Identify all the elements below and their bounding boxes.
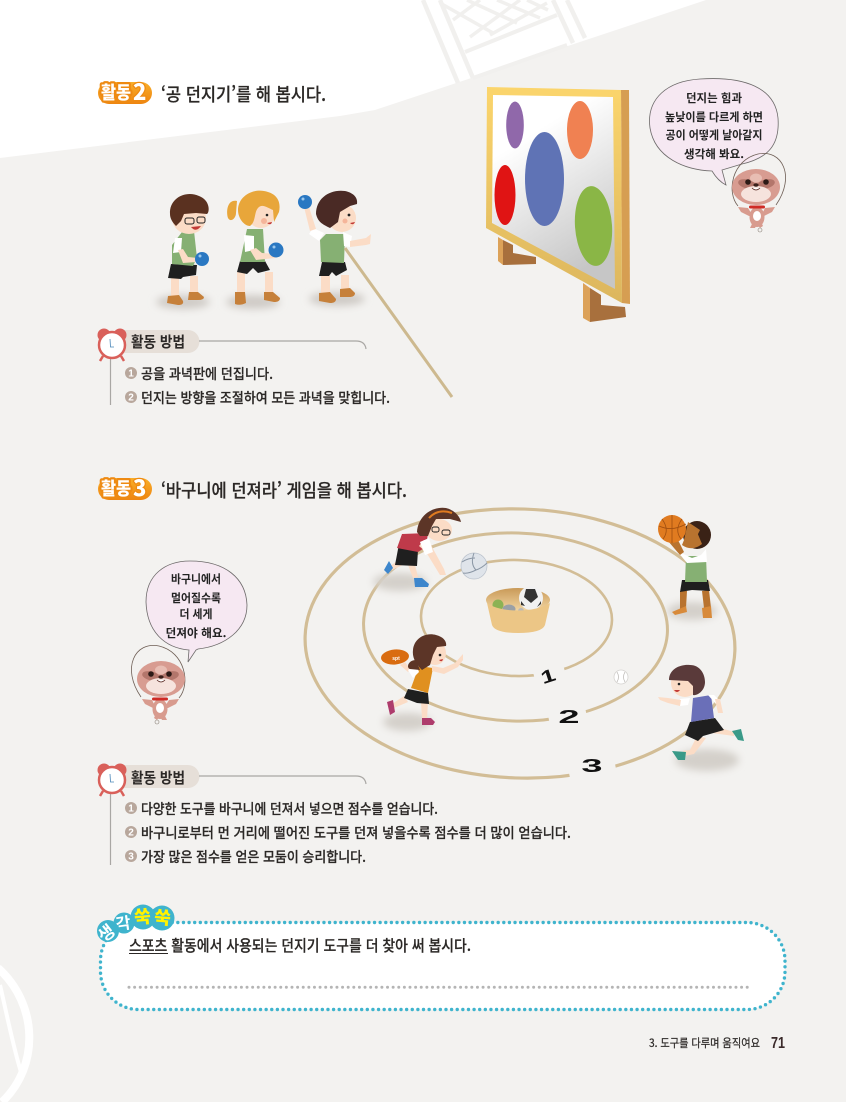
step 3: 3 — [128, 852, 134, 862]
volleyball — [461, 553, 487, 579]
small ball — [518, 608, 524, 614]
baseball — [614, 670, 628, 684]
dotted answer box — [100, 922, 785, 1010]
speech bubble: top right: 공이 어떻게 날아갈지 — [666, 127, 762, 143]
method section: activity 3 — [98, 764, 571, 867]
method label — [110, 765, 366, 865]
badge: think: 생 — [95, 921, 119, 946]
ring number 3: 3 — [581, 756, 603, 776]
method label: 활동 방법 — [131, 334, 185, 351]
kid: girl with headband — [373, 508, 461, 591]
footer: 3. 도구를 다루며 움직여요 — [649, 1035, 760, 1051]
target: purple — [506, 102, 524, 148]
background ring motif — [0, 968, 29, 1102]
step 2: 2 — [128, 392, 134, 404]
badge: think: 쑥 — [133, 906, 152, 928]
ring 1 — [420, 558, 613, 678]
heading: activity 3 — [98, 471, 407, 503]
target: green — [572, 185, 615, 267]
icon: alarm clock — [98, 328, 126, 361]
background net motif — [423, 0, 585, 83]
heading: activity 2: 활동 — [101, 79, 131, 105]
speech bubble: left: 멀어질수록 — [171, 590, 221, 606]
ring gaps — [534, 668, 616, 778]
speech bubble: top right: 높낮이를 다르게 하면 — [665, 109, 763, 125]
heading: activity 3: 3 — [133, 471, 146, 503]
ring number 2: 2 — [558, 707, 580, 727]
step 1: 다양한 도구를 바구니에 던져서 넣으면 점수를 얻습니다. — [141, 799, 438, 819]
concentric target rings — [300, 502, 740, 785]
heading: activity 3: ‘바구니에 던져라’ 게임을 해 봅시다. — [161, 477, 407, 503]
heading: activity 3: 활동 — [101, 475, 131, 501]
method label — [110, 330, 366, 405]
step 2: 2 — [128, 828, 134, 838]
green ball — [492, 600, 504, 610]
badge: think: 쑥 — [153, 907, 172, 929]
answer line — [129, 986, 751, 989]
ring 2 — [361, 529, 670, 725]
kid: boy with basketball — [658, 515, 717, 620]
target board — [486, 87, 630, 322]
speech bubble: left: 더 세게 — [180, 606, 212, 622]
badge: think: 각 — [115, 914, 132, 934]
basket body — [487, 603, 550, 633]
method section: activity 2 — [98, 328, 390, 408]
heading: activity 2: ‘공 던지기’를 해 봅시다. — [161, 81, 326, 107]
method label: 활동 방법 — [131, 770, 185, 787]
question text: 스포츠 활동에서 사용되는 던지기 도구를 더 찾아 써 봅시다. — [129, 934, 471, 956]
speech bubble: left — [146, 561, 247, 662]
speech bubble: left: 던져야 해요. — [166, 625, 226, 641]
board legs — [498, 237, 626, 322]
ring 3 — [300, 502, 740, 785]
speech bubble: top right: 생각해 봐요. — [684, 146, 744, 162]
step 3: 가장 많은 점수를 얻은 모둠이 승리합니다. — [141, 847, 366, 867]
step 2: 던지는 방향을 조절하여 모든 과녁을 맞힙니다. — [141, 388, 390, 408]
ring number 1: 1 — [538, 664, 558, 688]
target: blue — [525, 132, 564, 226]
speech bubble: left: 바구니에서 — [171, 571, 221, 587]
kid: girl with yellow hair — [226, 191, 284, 309]
grey ball — [502, 604, 516, 614]
icon: alarm clock — [98, 764, 126, 796]
kid: boy throwing blue ball — [298, 191, 371, 306]
panel: think further — [95, 904, 785, 1010]
soccer ball — [519, 586, 543, 610]
speech bubble: top right: 던지는 힘과 — [686, 90, 742, 106]
kid: girl with football — [380, 634, 463, 731]
step 2: 바구니로부터 먼 거리에 떨어진 도구를 던져 넣을수록 점수를 더 많이 얻습니다. — [141, 823, 571, 843]
speech bubble: top right — [650, 79, 778, 185]
white top background shape — [0, 0, 706, 158]
heading: activity 2: 2 — [133, 75, 146, 107]
throwing line — [345, 248, 452, 397]
target: red — [494, 165, 516, 225]
footer: 71 — [771, 1035, 785, 1052]
step 1: 공을 과녁판에 던집니다. — [141, 364, 273, 384]
heading: activity 2 — [98, 75, 326, 107]
kid: boy with glasses — [156, 194, 210, 309]
step 1: 1 — [128, 368, 134, 380]
target: orange — [567, 101, 593, 159]
kid: girl with football: spt — [392, 656, 400, 662]
board frame — [486, 87, 630, 304]
sloth mascot: left — [131, 645, 185, 724]
sloth mascot: top right — [732, 153, 786, 232]
basket with balls — [486, 586, 550, 633]
badge: think — [95, 904, 174, 946]
step 1: 1 — [128, 804, 134, 814]
kid: running boy — [658, 665, 744, 771]
